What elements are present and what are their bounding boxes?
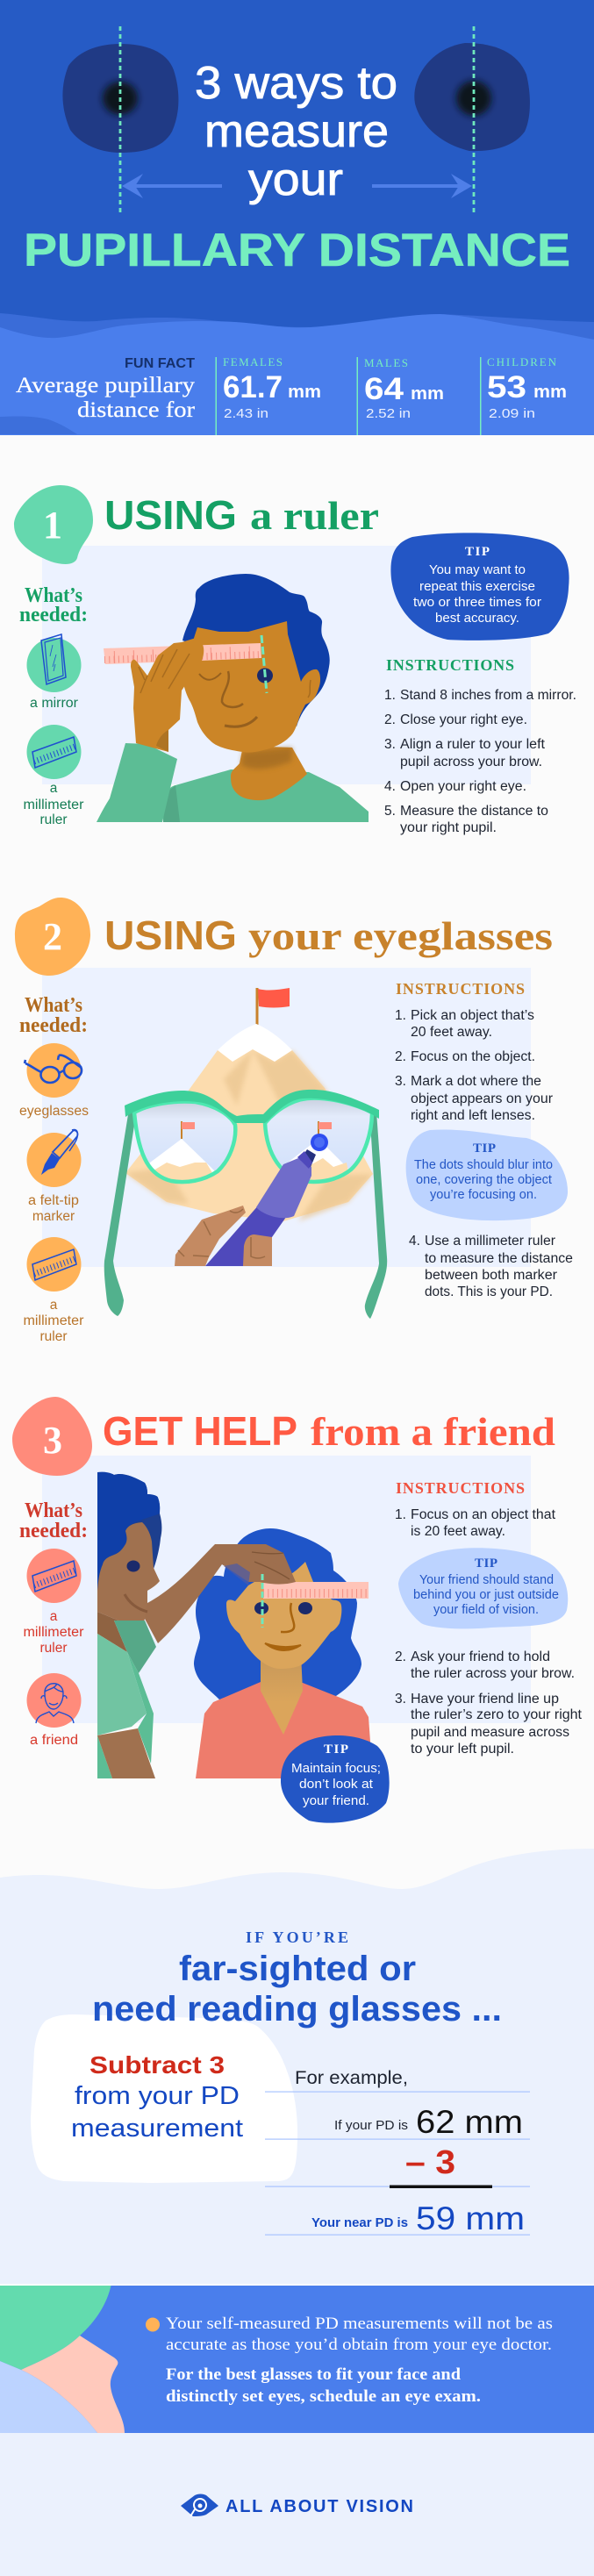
worked example: For example,	[295, 2068, 408, 2088]
illustration: friend holding ruler	[97, 1472, 373, 1778]
woman neck	[261, 1654, 303, 1735]
stat: females: 2.43 in	[224, 406, 268, 421]
instructions: Mark a dot where the	[411, 1074, 541, 1089]
instructions: 5.	[384, 804, 396, 819]
worked example: 62 mm	[416, 2104, 523, 2140]
tip bubble: repeat this exercise	[419, 579, 535, 594]
label: a felt-tip marker: a felt-tip	[28, 1193, 79, 1208]
illustration: man measuring with ruler	[97, 574, 369, 822]
instructions: 20 feet away.	[411, 1025, 492, 1040]
instruction steps 2 and 3: Have your friend line up	[411, 1692, 559, 1707]
right lens	[265, 1098, 372, 1184]
tip bubble	[406, 1129, 568, 1220]
instructions: 3.	[384, 737, 396, 752]
logo: all about vision: ALL ABOUT VISION	[225, 2497, 413, 2516]
instruction step 4: 4.	[409, 1234, 420, 1249]
icon: felt-tip marker	[26, 1129, 81, 1187]
icon: ruler	[26, 1237, 81, 1292]
what's needed: needed:	[19, 1014, 88, 1037]
stat: males	[356, 356, 444, 435]
note text: distinctly set eyes, schedule an eye exam.	[166, 2388, 481, 2406]
tip bubble: stand behind: your field of vision.	[433, 1602, 539, 1617]
icon: eyeglasses	[25, 1043, 82, 1098]
label: a millimeter ruler: millimeter	[23, 1625, 84, 1640]
instructions: Stand 8 inches from a mirror.	[400, 688, 576, 703]
instruction steps 2 and 3	[395, 1649, 583, 1757]
label: a friend: a friend	[30, 1733, 78, 1748]
label: a felt-tip marker	[28, 1193, 79, 1224]
worked example: – 3	[405, 2144, 455, 2181]
tip bubble: you’re focusing on.	[430, 1187, 537, 1202]
fun fact	[16, 356, 196, 422]
tip bubble: stand behind	[398, 1548, 568, 1628]
note text: For the best glasses to fit your face and	[166, 2366, 462, 2384]
stat: males: mm	[411, 384, 444, 404]
stat: children: mm	[533, 383, 567, 402]
heading	[104, 492, 379, 538]
number badge 3: 3	[43, 1419, 62, 1462]
note text: accurate as those you’d obtain from your eye doctor.	[166, 2336, 552, 2354]
icon: ruler	[26, 725, 81, 779]
instructions: Open your right eye.	[400, 779, 526, 794]
stat: females	[216, 355, 321, 435]
instructions: 1.	[384, 688, 396, 703]
tip bubble: one, covering the object	[416, 1172, 553, 1187]
title: measure	[204, 106, 389, 157]
subheading: IF YOU’RE	[246, 1928, 348, 1946]
panel: closing note	[0, 2284, 594, 2433]
what's needed	[19, 994, 88, 1037]
label: a millimeter ruler	[23, 1609, 84, 1656]
instructions: right and left lenses.	[411, 1108, 535, 1123]
heading: your eyeglasses	[248, 913, 553, 958]
fun fact: FUN FACT	[125, 356, 196, 371]
instruction step 4: to measure the distance	[425, 1251, 573, 1266]
woman hair	[194, 1528, 361, 1699]
panel: section 2 using your eyeglasses	[15, 898, 573, 1344]
pupil	[257, 669, 273, 683]
instructions: 2.	[384, 712, 396, 727]
dashed measure line	[261, 635, 267, 693]
icon: orange dot	[146, 2318, 160, 2332]
instructions: INSTRUCTIONS	[386, 656, 514, 674]
worked example: 59 mm	[416, 2200, 525, 2236]
what's needed	[19, 584, 88, 626]
tip bubble: two or three times for	[413, 595, 541, 610]
friend	[97, 1472, 296, 1778]
instruction steps 2 and 3: the ruler across your brow.	[411, 1666, 575, 1681]
heading	[104, 912, 553, 958]
hand and marker	[175, 1134, 328, 1266]
stat: males: 2.52 in	[366, 406, 411, 421]
instructions: is 20 feet away.	[411, 1524, 505, 1539]
tip bubble: best accuracy.	[435, 611, 519, 626]
heading: GET HELP	[103, 1408, 297, 1454]
tip bubble: You may want to	[429, 562, 526, 577]
instructions: object appears on your	[411, 1091, 553, 1106]
title	[195, 58, 397, 205]
instruction steps 2 and 3: pupil and measure across	[411, 1725, 569, 1740]
worked example	[265, 2068, 530, 2236]
what's needed: What’s	[25, 1499, 82, 1522]
illustration: mountain through eyeglasses	[104, 988, 387, 1319]
instructions: your right pupil.	[400, 820, 497, 835]
subtitle: pupillary distance: PUPILLARY DISTANCE	[24, 225, 570, 276]
title: 3 ways to	[195, 58, 397, 109]
panel: far-sighted section	[0, 1849, 594, 2576]
instructions: Focus on an object that	[411, 1507, 556, 1522]
label: a millimeter ruler: a	[50, 781, 58, 796]
label: a millimeter ruler: ruler	[39, 1641, 68, 1656]
instruction steps 2 and 3: to your left pupil.	[411, 1742, 514, 1757]
mountain	[125, 1024, 373, 1221]
number badge 2: 2	[43, 915, 62, 958]
icon: mirror	[26, 634, 81, 692]
callout text: subtract 3: from your PD	[75, 2082, 240, 2110]
instruction steps 2 and 3: Ask your friend to hold	[411, 1649, 550, 1664]
instructions	[395, 980, 553, 1123]
label: a millimeter ruler: a	[50, 1609, 58, 1624]
label: a millimeter ruler: ruler	[39, 1329, 68, 1344]
icon: friend	[26, 1673, 81, 1728]
callout: white blob	[31, 2014, 297, 2183]
woman shirt	[196, 1682, 373, 1778]
instructions: 1.	[395, 1008, 406, 1023]
instructions	[384, 656, 576, 835]
label: a felt-tip marker: marker	[32, 1209, 75, 1224]
worked example: Your near PD is	[311, 2216, 408, 2230]
icon: left eye	[62, 26, 178, 213]
number badge 2	[15, 898, 90, 976]
tip bubble: stand behind: Your friend should stand	[419, 1572, 554, 1587]
icon: right eye	[414, 26, 530, 213]
number badge 3	[12, 1397, 92, 1476]
label: a millimeter ruler: ruler	[39, 812, 68, 827]
heading: need reading glasses ...	[92, 1990, 502, 2029]
woman face	[226, 1562, 341, 1669]
what's needed: What’s	[25, 584, 82, 607]
logo: all about vision	[181, 2494, 413, 2516]
label: a millimeter ruler: millimeter	[23, 798, 84, 812]
instructions: Focus on the object.	[411, 1049, 535, 1064]
what's needed: needed:	[19, 1520, 88, 1542]
ruler	[104, 643, 261, 664]
left lens	[132, 1102, 235, 1184]
instructions: 4.	[384, 779, 396, 794]
stat: males: 64	[364, 372, 404, 406]
note text	[166, 2315, 553, 2406]
stat: females: mm	[288, 383, 321, 402]
note text: Your self-measured PD measurements will not be as	[166, 2315, 553, 2333]
heading	[92, 1950, 502, 2029]
tip bubble	[390, 533, 569, 640]
stat: children	[480, 355, 567, 435]
stat: males: MALES	[364, 356, 408, 369]
instruction steps 2 and 3: 3.	[395, 1692, 406, 1707]
label: a millimeter ruler: a	[50, 1298, 58, 1313]
callout text: subtract 3	[71, 2051, 243, 2143]
header banner	[0, 0, 594, 435]
instructions: 3.	[395, 1074, 406, 1089]
instructions: pupil across your brow.	[400, 755, 542, 769]
instruction step 4: Use a millimeter ruler	[425, 1234, 555, 1249]
woman features	[254, 1574, 312, 1650]
stat: females: FEMALES	[223, 355, 283, 369]
label: a mirror: a mirror	[30, 696, 78, 711]
stat: children: CHILDREN	[487, 355, 557, 369]
instruction step 4: dots. This is your PD.	[425, 1284, 553, 1299]
heading: far-sighted or	[179, 1950, 416, 1988]
tip bubble: maintain focus: your friend.	[303, 1793, 369, 1808]
tip bubble: TIP	[465, 545, 490, 559]
callout text: subtract 3: measurement	[71, 2114, 243, 2143]
label: a millimeter ruler	[23, 1298, 84, 1344]
instructions: 2.	[395, 1049, 406, 1064]
tip bubble: maintain focus: don’t look at	[299, 1777, 374, 1792]
callout text: subtract 3: Subtract 3	[89, 2051, 225, 2079]
what's needed: What’s	[25, 994, 82, 1017]
stat: children: 53	[487, 370, 526, 404]
tip bubble: maintain focus: TIP	[324, 1742, 348, 1757]
label: eyeglasses: eyeglasses	[19, 1104, 89, 1119]
heading: a ruler	[250, 493, 379, 538]
instructions: Align a ruler to your left	[400, 737, 546, 752]
tip bubble: stand behind: behind you or just outside	[413, 1587, 559, 1602]
tip bubble: maintain focus	[281, 1735, 390, 1823]
title: your	[248, 154, 343, 205]
label: a millimeter ruler: millimeter	[23, 1313, 84, 1328]
instruction step 4	[409, 1234, 573, 1299]
heading	[103, 1408, 555, 1454]
number badge 1: 1	[43, 504, 62, 547]
instructions: Pick an object that’s	[411, 1008, 534, 1023]
tip bubble: The dots should blur into	[414, 1157, 553, 1172]
instructions: INSTRUCTIONS	[396, 1479, 525, 1497]
heading: USING	[104, 912, 237, 958]
heading: from a friend	[311, 1409, 555, 1454]
instruction steps 2 and 3: 2.	[395, 1649, 406, 1664]
instruction step 4: between both marker	[425, 1268, 557, 1283]
instructions: INSTRUCTIONS	[396, 980, 525, 998]
fun fact: Average pupillary	[16, 374, 196, 397]
what's needed	[19, 1499, 88, 1542]
stat: children: 2.09 in	[489, 406, 535, 421]
fun fact: distance for	[77, 398, 196, 422]
flag	[256, 988, 290, 1025]
ruler	[263, 1582, 369, 1599]
tip bubble: maintain focus: Maintain focus;	[291, 1761, 381, 1776]
instructions: Measure the distance to	[400, 804, 548, 819]
stat: females: 61.7	[223, 370, 283, 404]
eyeglass front frame	[125, 1090, 379, 1123]
panel: section 1 using a ruler	[14, 485, 576, 835]
tip bubble: stand behind: TIP	[475, 1556, 497, 1571]
label: a millimeter ruler	[23, 781, 84, 827]
icon: ruler	[26, 1549, 81, 1603]
tip bubble: TIP	[473, 1141, 496, 1156]
panel: section 3 get help from a friend	[12, 1397, 583, 1823]
arrow: right	[372, 174, 472, 198]
instructions	[395, 1479, 556, 1539]
arrow: left	[122, 174, 222, 198]
heading: USING	[104, 492, 237, 538]
worked example: If your PD is	[334, 2118, 408, 2133]
instructions: 1.	[395, 1507, 406, 1522]
number badge 1	[14, 485, 93, 564]
instruction steps 2 and 3: the ruler’s zero to your right	[411, 1707, 583, 1722]
what's needed: needed:	[19, 604, 88, 626]
eyeglass temples	[104, 1104, 387, 1319]
instructions: Close your right eye.	[400, 712, 527, 727]
